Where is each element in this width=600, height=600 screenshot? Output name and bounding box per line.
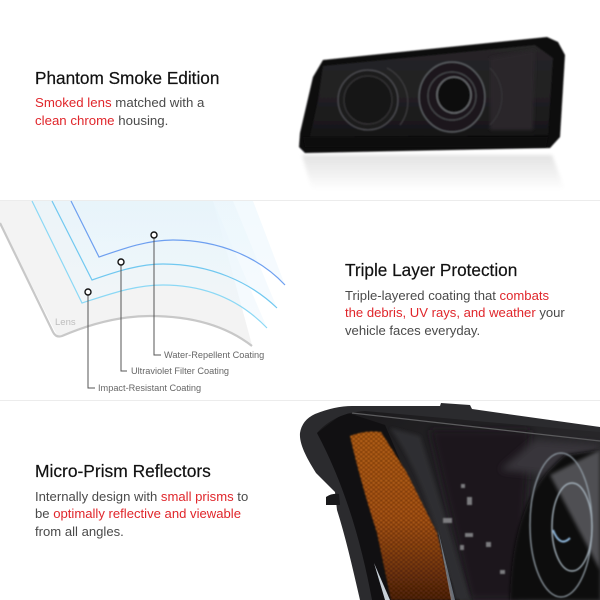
heading: micro-prism reflectors: Micro-Prism Reflectors (35, 461, 211, 481)
body: micro-prism: Internally design with small prisms to (35, 488, 248, 504)
reflector sparkles (443, 484, 505, 574)
right projector (419, 62, 502, 132)
body: triple layer: the debris, UV rays, and weather your (345, 305, 565, 320)
callout: ultraviolet filter coating: Ultraviolet Filter Coating (131, 366, 229, 376)
light wedge on projector (550, 450, 600, 570)
heading: phantom smoke edition: Phantom Smoke Edition (35, 68, 219, 88)
body: triple layer: Triple-layered coating that combats (345, 288, 549, 302)
dark corner inside lens (317, 412, 460, 600)
impact-resistant layer (32, 201, 267, 328)
body: micro-prism: be optimally reflective and viewable (35, 506, 241, 521)
panel: micro-prism text (35, 461, 248, 539)
left projector (338, 68, 408, 130)
panel: bottom headlight photo (300, 403, 600, 600)
panel: coating layer diagram (0, 201, 285, 393)
body: phantom smoke (35, 95, 204, 128)
lens layer (0, 201, 252, 346)
grey reflection band (390, 428, 470, 600)
lower chrome glint (374, 563, 390, 600)
body: micro-prism: from all angles. (35, 524, 124, 539)
ultraviolet filter layer (52, 201, 277, 308)
callout: ultraviolet filter coating (118, 259, 229, 376)
upper trim line (352, 413, 600, 441)
headlight housing (299, 37, 565, 153)
headlight reflection (302, 155, 565, 190)
turn signal speckle (490, 50, 535, 130)
lower chrome lip (303, 137, 548, 147)
mounting tab (326, 494, 340, 505)
projector rings (530, 453, 592, 597)
heading: triple layer protection: Triple Layer Protection (345, 260, 517, 280)
body: phantom smoke: clean chrome housing. (35, 113, 168, 128)
water-repellent layer (71, 201, 285, 285)
smoked lens (310, 45, 553, 137)
clipped lens details (317, 412, 600, 600)
panel: triple layer text (345, 260, 565, 338)
upper gloss on lens (502, 440, 599, 475)
callout: water-repellent coating (151, 232, 264, 360)
label: lens: Lens (55, 317, 76, 328)
body: micro-prism (35, 488, 248, 539)
callout: water-repellent coating: Water-Repellent Coating (164, 350, 264, 360)
projector background (510, 450, 600, 600)
smoked lens surface (317, 411, 600, 600)
outer housing (300, 403, 600, 600)
interior reflector (430, 430, 530, 600)
body: phantom smoke: Smoked lens matched with a (35, 95, 204, 110)
amber marker lens (350, 432, 453, 600)
panel dividers (0, 200, 600, 401)
callout: impact-resistant coating: Impact-Resistant Coating (98, 383, 201, 393)
panel: top headlight photo (299, 37, 565, 190)
callout: impact-resistant coating (85, 289, 201, 393)
panel: phantom smoke text (35, 68, 219, 128)
body: triple layer: vehicle faces everyday. (345, 323, 480, 338)
body: triple layer (345, 288, 565, 338)
